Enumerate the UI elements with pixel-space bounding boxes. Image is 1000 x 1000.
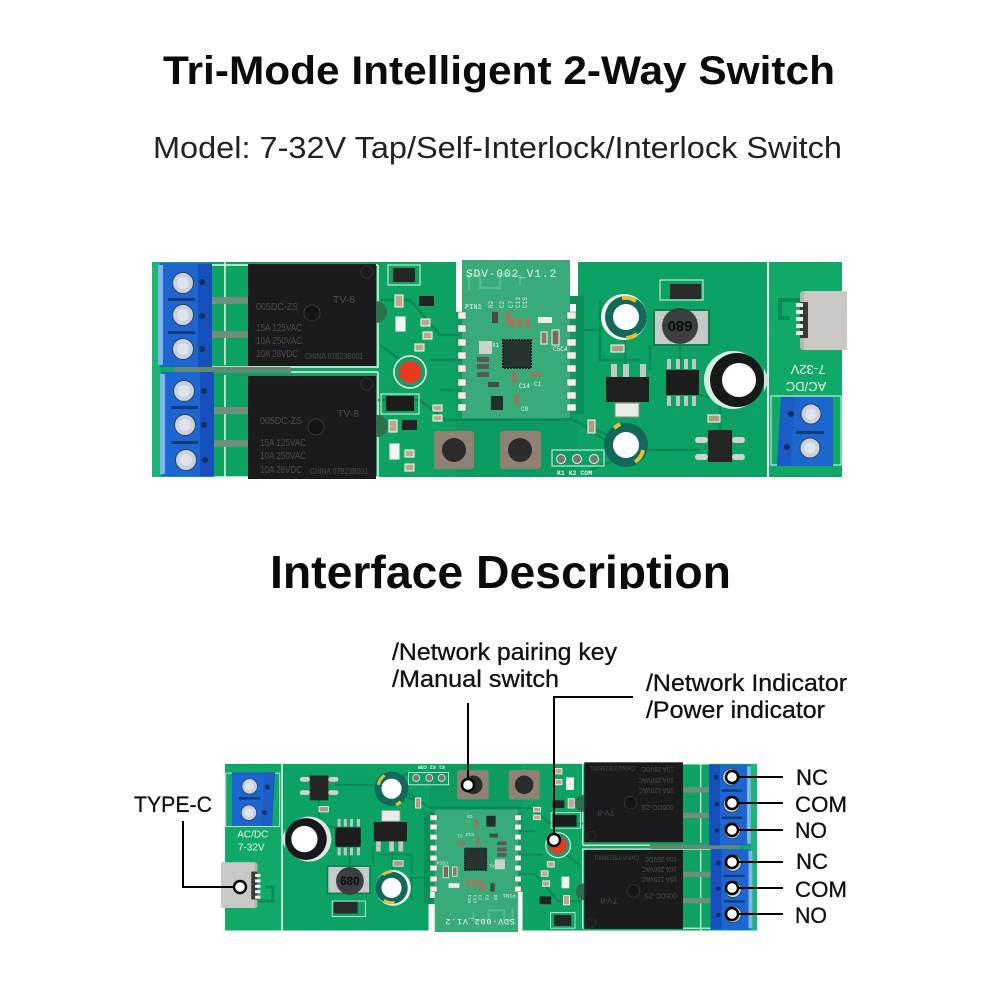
terminal labels: upper relay: NC (796, 765, 828, 790)
inductor (654, 308, 709, 345)
terminal block lower (160, 372, 214, 476)
label: network and power indicators: /Network Indicator (646, 670, 847, 697)
pin header K1 K2 COM (552, 450, 604, 477)
wireless module (458, 260, 576, 418)
label: type-c: TYPE-C (134, 792, 212, 817)
wireless module: C15 (522, 297, 529, 308)
relay upper: 10A 250VAC (256, 336, 302, 347)
callout: button leader (462, 703, 474, 791)
wireless module: C8 (521, 406, 529, 413)
label: network and power indicators: /Power indicator (646, 697, 825, 724)
relay upper: 005DC-ZS (256, 302, 298, 313)
inductor: 680 (667, 317, 693, 334)
pin header K1 K2 COM: K1 K2 COM (557, 470, 592, 477)
wireless module: SDV-002_V1.2 (466, 269, 557, 281)
relay upper: 15A 125VAC (256, 323, 302, 334)
terminal labels: lower relay: NC (796, 849, 828, 874)
wireless module: C13 (515, 297, 522, 308)
wireless module: C7 (508, 300, 515, 308)
wireless module: PIN1 (465, 304, 482, 312)
wireless module: C14 (519, 383, 530, 390)
terminal labels: lower relay (726, 849, 847, 928)
power input: USB-C connector, text, terminal: 7-32V (790, 362, 825, 377)
label: network pairing key and manual switch: /Network pairing key (392, 639, 617, 666)
wireless module: C1 (534, 381, 542, 388)
relay lower: TV-8 (337, 409, 359, 420)
terminal labels: lower relay: COM (795, 877, 847, 902)
QFN chip (503, 340, 531, 368)
product photo: circuit board (152, 260, 847, 479)
interface diagram: rotated circuit board (221, 762, 757, 932)
power input: USB-C connector, text, terminal: AC/DC (786, 379, 826, 394)
relay upper: CHINA 07B23B001 (305, 352, 363, 361)
relay lower (248, 376, 388, 479)
relay lower: 005DC-ZS (260, 416, 302, 427)
red LED (394, 356, 426, 388)
terminal labels: upper relay: NO (795, 818, 827, 843)
electrolytic capacitors (601, 294, 769, 467)
relay lower: 10A 28VDC (260, 465, 302, 476)
label: network pairing key and manual switch (392, 639, 617, 693)
relay upper (248, 264, 387, 366)
power input: USB-C connector, text, terminal (771, 291, 847, 466)
wireless module: X1 (492, 342, 500, 349)
subtitle: model: Model: 7-32V Tap/Self-Interlock/Interlock Switch (153, 130, 842, 165)
relay upper: 10A 28VDC (256, 349, 298, 360)
tactile buttons (434, 431, 541, 469)
terminal labels: upper relay: COM (795, 792, 847, 817)
callout: indicator leader (548, 697, 633, 846)
terminal labels: lower relay: NO (795, 903, 827, 928)
slot and grey relay traces (173, 297, 292, 447)
terminal block upper (158, 263, 212, 367)
voltage regulators and diodes (588, 280, 745, 462)
callout: type-c leader (183, 821, 246, 893)
heading: interface description: Interface Description (270, 546, 731, 598)
relay lower: CHINA 07B23B001 (310, 467, 368, 476)
wireless module: C2 (499, 300, 506, 308)
module castellated pads (458, 312, 576, 411)
relay upper: TV-8 (333, 295, 355, 306)
relay lower: 10A 250VAC (260, 451, 306, 462)
terminal labels: upper relay (726, 765, 847, 843)
wireless module: R2 (488, 300, 495, 308)
label: network pairing key and manual switch: /Manual switch (392, 666, 559, 693)
wireless module: C5C4 (553, 346, 568, 353)
power section SMD parts (381, 265, 442, 471)
board base (152, 262, 842, 477)
label: network and power indicators (646, 670, 847, 724)
copper traces (378, 300, 720, 470)
relay lower: 15A 125VAC (260, 438, 306, 449)
title: Tri-Mode Intelligent 2-Way Switch (163, 49, 835, 93)
